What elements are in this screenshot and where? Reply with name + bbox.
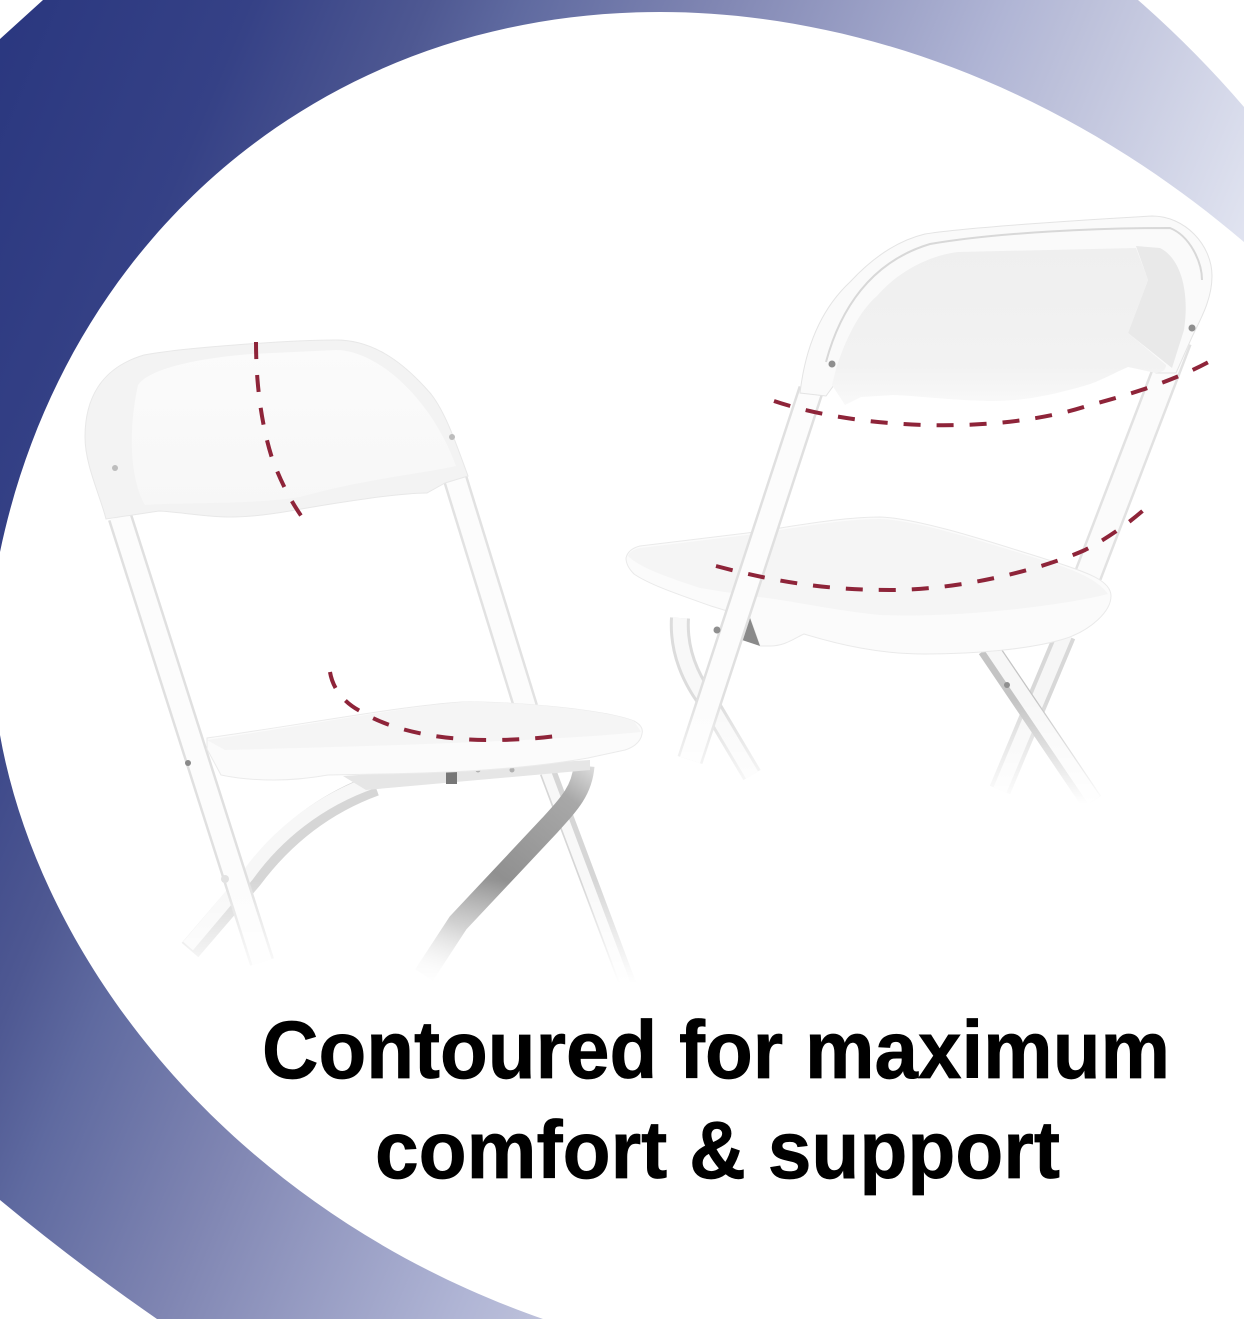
right seat contour [716, 508, 1146, 590]
right chair backrest panel [832, 248, 1166, 405]
left chair backrest [85, 340, 468, 519]
right chair backrest inner ribs [1128, 246, 1186, 368]
right chair right upright [1088, 340, 1178, 575]
heading line 2: comfort & support [375, 1105, 1060, 1196]
left chair crossing legs [424, 766, 628, 985]
left chair cross bar [343, 760, 590, 790]
heading [262, 1005, 1170, 1196]
left chair screws [112, 434, 455, 883]
right backrest contour [774, 359, 1214, 425]
left chair rear leg tube [188, 782, 375, 950]
contour lines [256, 342, 1214, 740]
right chair screws [714, 324, 1196, 688]
right chair [626, 216, 1212, 815]
right chair frame highlight [826, 228, 1202, 362]
heading line 1: Contoured for maximum [262, 1005, 1170, 1096]
right chair seat [626, 517, 1111, 654]
left seat contour [330, 672, 556, 740]
left chair [85, 340, 650, 995]
right chair left upright [690, 390, 811, 760]
left chair leg fade [170, 880, 650, 995]
left backrest contour [256, 342, 302, 517]
right chair rear legs [680, 618, 1094, 802]
left chair uprights [120, 478, 526, 962]
left chair seat [207, 702, 642, 780]
right chair leg fade [650, 700, 1110, 815]
right chair backrest frame [800, 216, 1212, 396]
